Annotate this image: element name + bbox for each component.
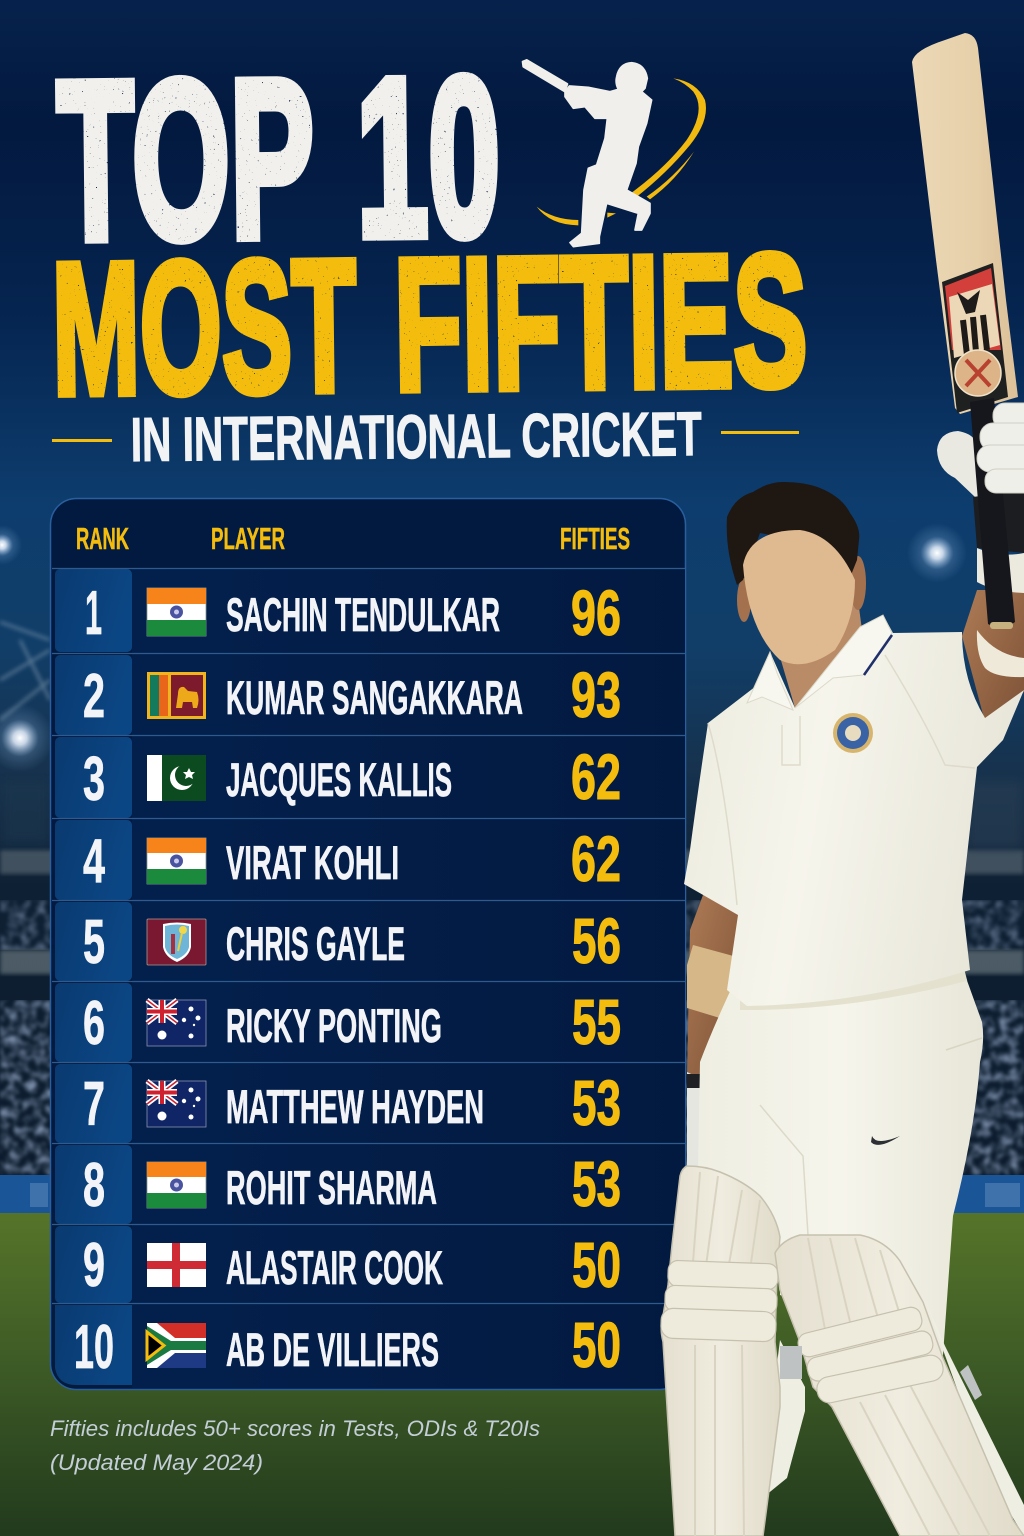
row 2: KUMAR SANGAKKARA [226,671,523,724]
row 10: AB DE VILLIERS [226,1323,439,1376]
raised right arm [962,548,1024,722]
table header: RANK [76,521,129,556]
row 3: JACQUES KALLIS [226,753,452,806]
background: grass field [0,1213,1024,1536]
head [727,482,866,664]
table background [50,498,686,1390]
trousers [698,975,1024,1536]
row 2 [55,654,685,735]
row 4: 62 [571,823,621,895]
left leg pad [661,1166,780,1536]
badge: BCCI crest [833,713,873,753]
row 1: 96 [571,577,621,649]
subtitle: in international cricket [52,400,799,475]
footnote: Fifties includes 50+ scores in Tests, ODIs & T20Is [50,1416,540,1441]
row 5: CHRIS GAYLE [226,917,405,970]
row 7: 7 [83,1070,105,1139]
subtitle: in international cricket: IN INTERNATIONAL CRICKET [130,400,702,475]
icon: batsman silhouette with gold swoosh [523,60,706,247]
swoosh logo on trousers [871,1136,900,1145]
row 8: ROHIT SHARMA [226,1161,437,1214]
row 7: 53 [572,1067,621,1139]
row 10 [55,1304,685,1388]
title: most fifties: MOST [51,220,357,434]
row dividers [52,568,685,1304]
row 5 [55,901,685,981]
pad straps [780,1346,982,1400]
neck [775,600,862,708]
row 6: 6 [83,989,105,1058]
glove strap [973,490,1024,553]
row 1 [55,569,685,653]
row 9 [55,1225,685,1303]
title: top 10: 10 [355,29,501,284]
table header [76,521,630,556]
row 7 [55,1063,685,1143]
collar [747,615,892,710]
row 6: 55 [572,986,621,1058]
row 1: SACHIN TENDULKAR [226,588,500,641]
footnote [50,1416,540,1475]
title: top 10: TOP [56,31,315,287]
row 6 [55,982,685,1062]
left arm with armband and glove [687,895,740,1166]
row 1: 1 [85,579,102,648]
row 6: RICKY PONTING [226,999,442,1052]
right leg pad [775,1235,1024,1536]
row 8: 8 [83,1151,105,1220]
shirt [684,615,1024,1006]
row 9: 9 [83,1231,105,1300]
row 5: 5 [83,908,105,977]
row 4: VIRAT KOHLI [226,836,399,889]
row 3: 3 [83,745,105,814]
row 8: 53 [572,1148,621,1220]
row 2: 93 [571,659,621,731]
row 4 [55,819,685,900]
lower glove [937,431,985,500]
row 8 [55,1144,685,1224]
row 9: ALASTAIR COOK [226,1241,443,1294]
background: floodlights [0,523,967,772]
player: cricketer raising bat [661,33,1024,1536]
upper glove [977,403,1024,493]
background: stadium stands and crowd [0,622,1024,1175]
row 9: 50 [572,1229,621,1301]
table header: PLAYER [211,521,285,556]
row 7: MATTHEW HAYDEN [226,1080,484,1133]
row 3 [55,736,685,818]
footnote: (Updated May 2024) [50,1450,263,1475]
row 4: 4 [83,827,105,896]
bat blade with sticker [912,33,1018,414]
collar trim [864,635,892,675]
row 10: 10 [74,1313,114,1382]
row 2: 2 [83,662,105,731]
table header: FIFTIES [560,521,630,556]
background: advertising boards [0,1175,1024,1213]
row 5: 56 [572,905,621,977]
row 3: 62 [571,741,621,813]
row 10: 50 [572,1309,621,1381]
panel: rankings table [50,498,686,1390]
bat handle [970,398,1015,629]
